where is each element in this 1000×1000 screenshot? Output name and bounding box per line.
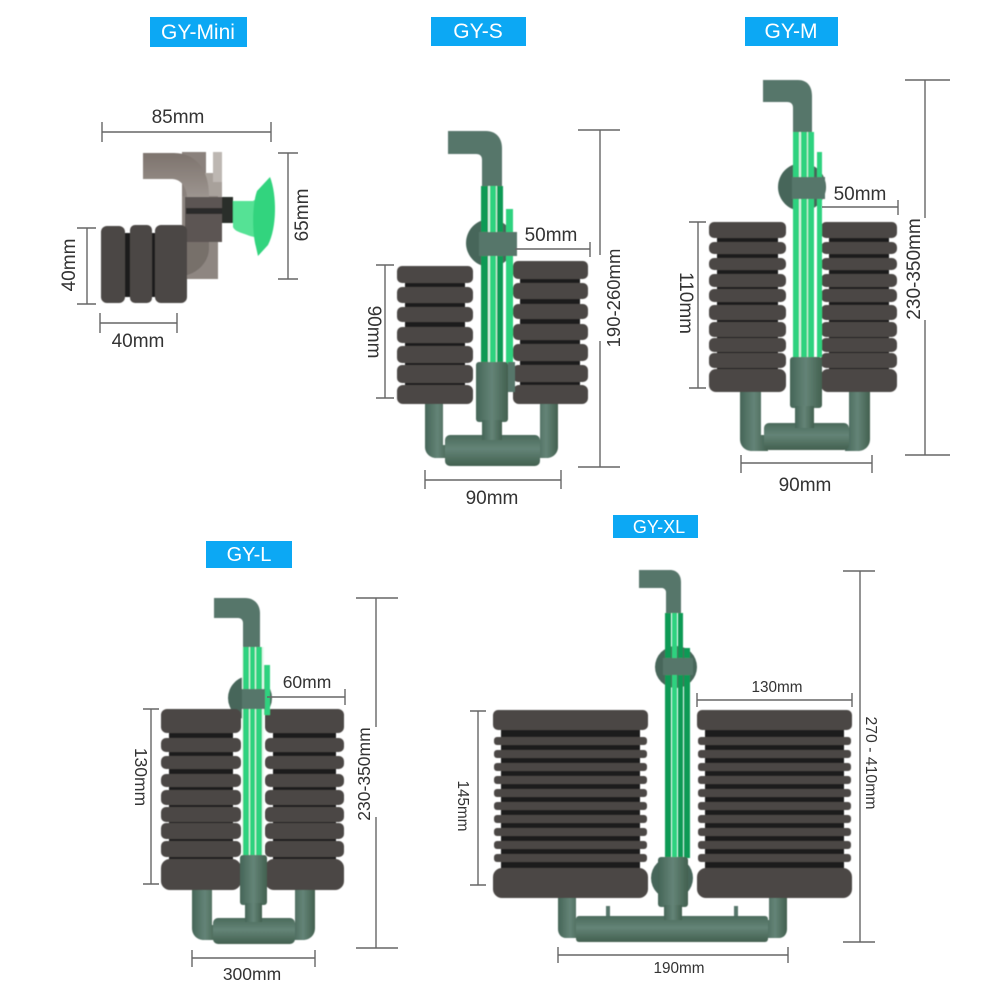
- right sponge: [821, 222, 897, 392]
- dimension: 230-350mm: [904, 80, 950, 455]
- dimension: 110mm: [675, 222, 706, 388]
- dimension: 230-350mm: [354, 598, 398, 948]
- dimension: 190mm: 190mm: [653, 960, 705, 977]
- dimension: 40mm width: [100, 313, 177, 352]
- dimension: 190-260mm: [578, 130, 624, 467]
- right sponge: [265, 709, 344, 890]
- dimension: 50mm: 50mm: [525, 225, 577, 246]
- label: GY-Mini: GY-Mini: [161, 21, 235, 44]
- tubes: [665, 613, 690, 858]
- dimension: 130mm: [131, 709, 159, 884]
- dimension: 90mm: [741, 455, 872, 496]
- panel: GY-L: [131, 541, 398, 984]
- icon: GY-M filter: [709, 80, 897, 451]
- dimension: 110mm: 110mm: [675, 272, 696, 334]
- dimension: 90mm height: 90mm: [363, 306, 384, 358]
- left sponge: [397, 266, 473, 404]
- dimension: 145mm: [454, 711, 486, 885]
- dimension: 85mm: [102, 107, 271, 142]
- dimension: 50mm: [515, 225, 590, 257]
- right sponge: [697, 710, 852, 898]
- tubes: [242, 647, 270, 857]
- dimension: 60mm: [267, 672, 345, 705]
- right sponge: [513, 261, 588, 404]
- label: GY-XL: GY-XL: [633, 517, 685, 537]
- label: GY-Mini: [150, 17, 247, 47]
- label: GY-M: [745, 17, 838, 46]
- dimension: 300mm: 300mm: [223, 964, 281, 984]
- dimension: 230-350mm: 230-350mm: [904, 218, 925, 320]
- left sponge: [493, 710, 648, 898]
- dimension: 60mm: 60mm: [283, 672, 331, 692]
- dimension: 145mm: 145mm: [454, 780, 471, 832]
- dimension: 65mm: [278, 153, 313, 279]
- label: GY-L: GY-L: [227, 544, 271, 566]
- icon: mini filter: [101, 152, 275, 303]
- icon: GY-L filter: [161, 598, 344, 944]
- dimension: 90mm width: [425, 470, 561, 509]
- dimension: 50mm: [822, 184, 898, 215]
- dimension: 85mm: 85mm: [152, 107, 204, 128]
- label: GY-L: [206, 541, 292, 568]
- dimension: 90mm: 90mm: [779, 475, 831, 496]
- dimension: 65mm: 65mm: [292, 189, 313, 241]
- icon: GY-S filter: [397, 131, 588, 466]
- icon: GY-XL filter: [493, 570, 852, 942]
- dimension: 90mm height: [363, 265, 394, 398]
- dimension: 130mm: [697, 679, 852, 707]
- dimension: 270-410mm: 270 - 410mm: [862, 716, 879, 810]
- sponge: [101, 225, 187, 303]
- dimension: 130mm: 130mm: [751, 679, 803, 696]
- panel: GY-XL: [454, 515, 879, 977]
- label: GY-S: [431, 17, 526, 46]
- panel: GY-S: [363, 17, 624, 509]
- dimension: 40mm height: [59, 228, 96, 304]
- tubes: [793, 132, 822, 360]
- dimension: 90mm width: 90mm: [466, 488, 518, 509]
- dimension: 130mm: 130mm: [131, 748, 151, 806]
- label: GY-XL: [613, 515, 698, 538]
- dimension: 50mm: 50mm: [834, 184, 886, 205]
- dimension: 270-410mm: [843, 571, 879, 942]
- left sponge: [161, 709, 241, 890]
- dimension: 190mm: [558, 947, 788, 977]
- dimension: 40mm height: 40mm: [59, 239, 80, 291]
- dimension: 230-350mm: 230-350mm: [354, 727, 374, 821]
- dimension: 300mm: [192, 950, 315, 984]
- left sponge: [709, 222, 786, 392]
- panel: GY-Mini: [59, 17, 313, 352]
- dimension: 40mm width: 40mm: [112, 331, 164, 352]
- label: GY-S: GY-S: [453, 20, 503, 43]
- dimension: 190-260mm: 190-260mm: [603, 249, 624, 347]
- tubes: [481, 186, 513, 364]
- label: GY-M: GY-M: [765, 20, 817, 43]
- panel: GY-M: [675, 17, 950, 496]
